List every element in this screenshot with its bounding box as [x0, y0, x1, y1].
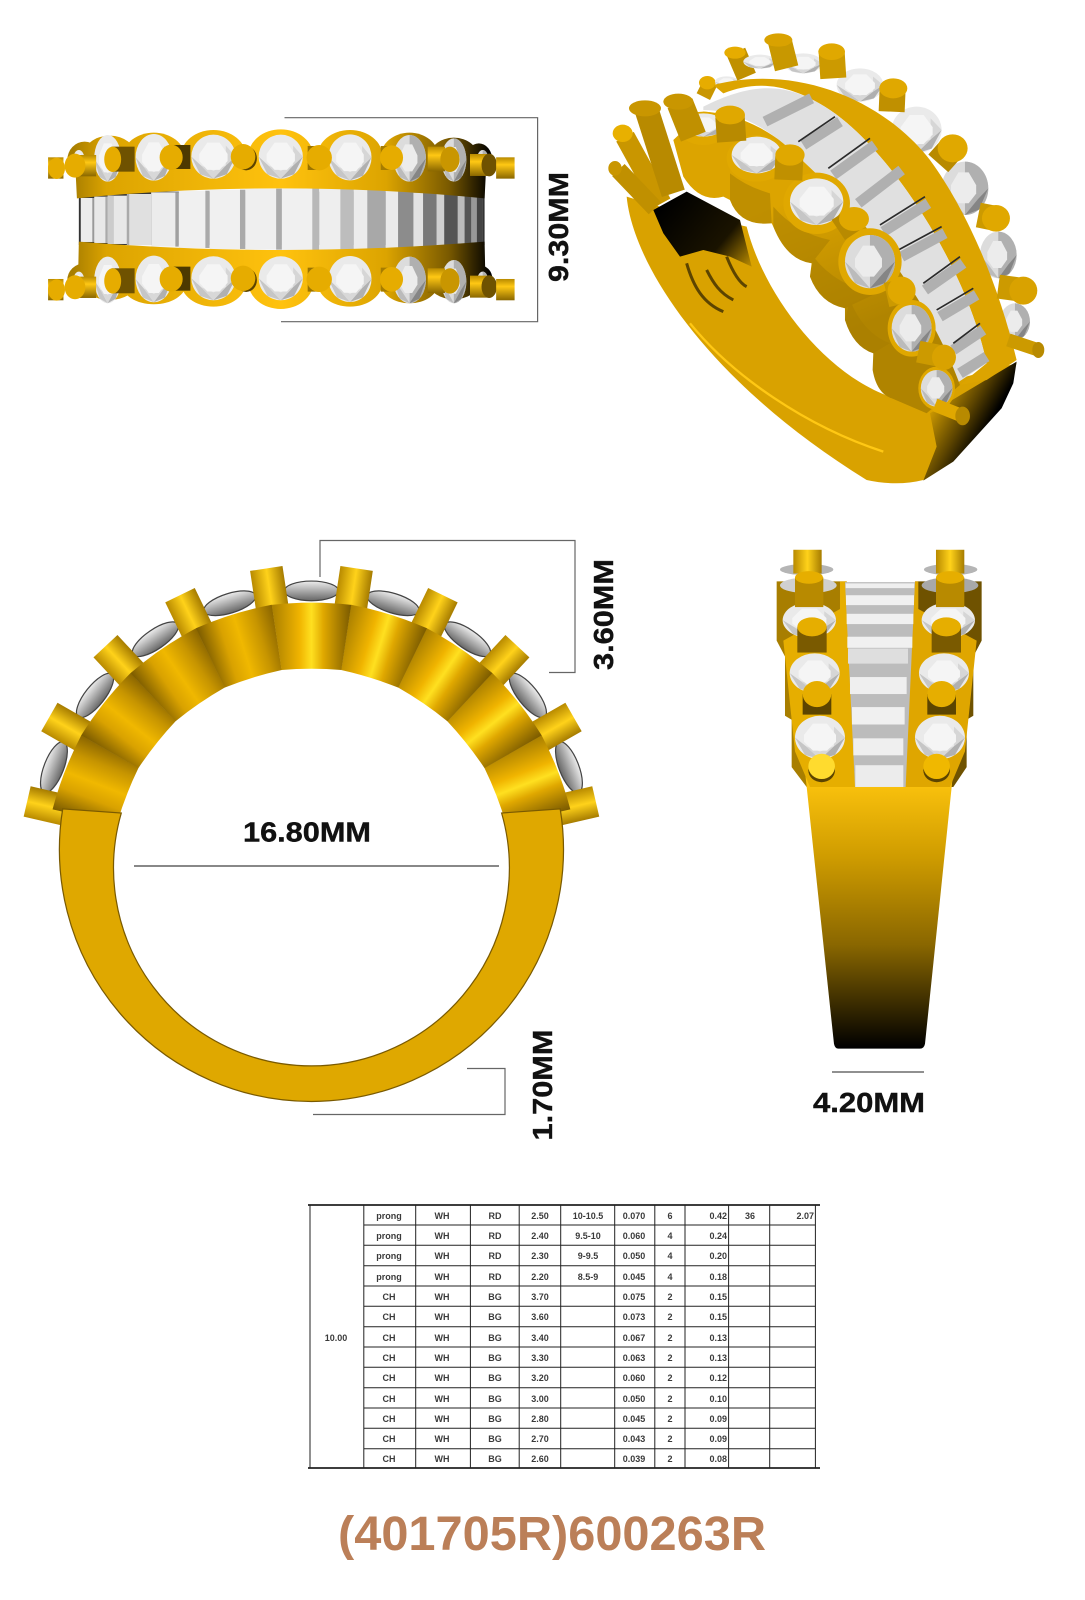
table rows: 2: [667, 1353, 673, 1363]
lower scalloped settings: [67, 254, 492, 309]
dimension line: 9.30MM: [281, 118, 538, 322]
shank shaded end: [923, 362, 1017, 481]
table rows: 2.50: [531, 1211, 549, 1221]
dimension line: 16.80MM: [134, 865, 499, 867]
table rows: 0.070: [623, 1211, 645, 1221]
table rows: 4: [667, 1251, 673, 1261]
table rows: RD: [488, 1272, 502, 1282]
table rows: 36: [745, 1211, 755, 1221]
table rows: 0.18: [709, 1272, 727, 1282]
panel: perspective view of ring: [608, 33, 1044, 483]
baguette stone row: [81, 188, 483, 250]
table rows: WH: [434, 1353, 450, 1363]
table rows: 3.70: [531, 1292, 549, 1302]
table rows: CH: [382, 1454, 396, 1464]
table rows: 0.09: [709, 1414, 727, 1424]
table rows: WH: [434, 1292, 450, 1302]
table rows: CH: [382, 1414, 396, 1424]
table rows: 9.5-10: [575, 1231, 601, 1241]
table rows: BG: [488, 1373, 502, 1383]
table rows: 0.15: [709, 1292, 727, 1302]
table rows: 2: [667, 1312, 673, 1322]
table rows: 4: [667, 1231, 673, 1241]
table rows: RD: [488, 1231, 502, 1241]
table rows: 0.050: [623, 1394, 645, 1404]
rear row far stones: [699, 47, 1030, 340]
table rows: 0.13: [709, 1353, 727, 1363]
table rows: BG: [488, 1333, 502, 1343]
table rows: prong: [376, 1251, 402, 1261]
table rows: 0.060: [623, 1231, 645, 1241]
table rows: WH: [434, 1272, 450, 1282]
table rows: BG: [488, 1353, 502, 1363]
table rows: 0.42: [709, 1211, 727, 1221]
table rows: 0.060: [623, 1373, 645, 1383]
panel: side view of ring: [777, 550, 982, 1049]
table rows: WH: [434, 1434, 450, 1444]
table rows: 0.045: [623, 1414, 645, 1424]
shank highlight: [690, 323, 883, 452]
stone specification table: [308, 1205, 820, 1468]
round stones left and right: [783, 602, 975, 759]
dimension line: 1.70MM: [313, 1068, 505, 1114]
table rows: 0.043: [623, 1434, 645, 1444]
table rows: 0.09: [709, 1434, 727, 1444]
engraved logo shadow: [653, 192, 752, 312]
table rows: WH: [434, 1414, 450, 1424]
table rows: 3.40: [531, 1333, 549, 1343]
table rows: CH: [382, 1292, 396, 1302]
back body of ring: [79, 192, 485, 245]
table rows: WH: [434, 1373, 450, 1383]
table rows: BG: [488, 1292, 502, 1302]
table rows: 0.15: [709, 1312, 727, 1322]
table rows: 6: [667, 1211, 673, 1221]
front row round stones: [682, 113, 952, 407]
cup shading: [730, 173, 890, 353]
upper pair of stones: [780, 564, 978, 593]
table rows: WH: [434, 1394, 450, 1404]
shank: [805, 771, 953, 1049]
label: 9.30MM: 9.30MM: [543, 172, 574, 282]
panel: front view of ring: [24, 566, 599, 1101]
table rows: BG: [488, 1434, 502, 1444]
radial gold settings: [50, 603, 572, 833]
table rows: CH: [382, 1394, 396, 1404]
merged size cell: 10.00: [325, 1333, 347, 1343]
baguette channel: [703, 88, 987, 383]
table rows: BG: [488, 1312, 502, 1322]
table rows: 9-9.5: [578, 1251, 598, 1261]
table rows: WH: [434, 1312, 450, 1322]
table rows: RD: [488, 1251, 502, 1261]
table rows: 2.30: [531, 1251, 549, 1261]
baguette stack: [845, 582, 915, 787]
table rows: prong: [376, 1272, 402, 1282]
table rows: BG: [488, 1454, 502, 1464]
gold inner setting: [783, 581, 855, 787]
table grid: [308, 1205, 820, 1468]
table rows: prong: [376, 1231, 402, 1241]
table rows: BG: [488, 1414, 502, 1424]
table rows: CH: [382, 1333, 396, 1343]
lower row of round stones and prongs: [48, 256, 515, 303]
table rows: 0.075: [623, 1292, 645, 1302]
table rows: 0.039: [623, 1454, 645, 1464]
table rows: prong: [376, 1211, 402, 1221]
table rows: 3.60: [531, 1312, 549, 1322]
table rows: RD: [488, 1211, 502, 1221]
table rows: 0.13: [709, 1333, 727, 1343]
table rows: [376, 1211, 814, 1464]
title: product code: (401705R)600263R: [338, 1508, 766, 1561]
table rows: 0.073: [623, 1312, 645, 1322]
table rows: 0.050: [623, 1251, 645, 1261]
gold setting backing: [777, 581, 857, 787]
table rows: 2: [667, 1434, 673, 1444]
table rows: BG: [488, 1394, 502, 1404]
label: 4.20MM: 4.20MM: [813, 1087, 925, 1118]
side-on round stones: [35, 581, 588, 796]
table rows: 3.00: [531, 1394, 549, 1404]
upper row of round stones and prongs: [48, 134, 515, 182]
outer gold rail: [713, 79, 1017, 385]
table rows: 2.20: [531, 1272, 549, 1282]
table rows: 8.5-9: [578, 1272, 598, 1282]
table rows: 0.10: [709, 1394, 727, 1404]
ring shank: [59, 809, 563, 1101]
table rows: 0.12: [709, 1373, 727, 1383]
table rows: 2.40: [531, 1231, 549, 1241]
upper gold rail: [75, 160, 487, 198]
table rows: 2.70: [531, 1434, 549, 1444]
table rows: 2.60: [531, 1454, 549, 1464]
table rows: 2: [667, 1292, 673, 1302]
table rows: WH: [434, 1251, 450, 1261]
baguette facets: [765, 98, 987, 373]
table rows: 0.20: [709, 1251, 727, 1261]
table rows: CH: [382, 1434, 396, 1444]
table rows: 2.80: [531, 1414, 549, 1424]
prongs: [608, 33, 1044, 425]
table rows: WH: [434, 1333, 450, 1343]
label: 3.60MM: 3.60MM: [588, 559, 619, 670]
table rows: WH: [434, 1211, 450, 1221]
radial prongs: [24, 566, 599, 827]
panel: top view of ring: [48, 129, 515, 309]
label: 16.80MM: 16.80MM: [243, 816, 371, 848]
table rows: CH: [382, 1353, 396, 1363]
upper scalloped settings: [67, 129, 492, 184]
table rows: 2: [667, 1333, 673, 1343]
table rows: WH: [434, 1231, 450, 1241]
prongs: [793, 550, 964, 782]
dimension line: 4.20MM: [832, 1071, 924, 1073]
table rows: 0.063: [623, 1353, 645, 1363]
shank: [627, 197, 1017, 483]
table rows: CH: [382, 1312, 396, 1322]
front cup body with scalloped edge: [673, 112, 960, 413]
label: 1.70MM: 1.70MM: [527, 1030, 558, 1140]
dimension line: 3.60MM: [320, 540, 575, 672]
table rows: 0.067: [623, 1333, 645, 1343]
table rows: 2: [667, 1373, 673, 1383]
table rows: 0.045: [623, 1272, 645, 1282]
table rows: 2: [667, 1414, 673, 1424]
table rows: 10-10.5: [573, 1211, 603, 1221]
table rows: 0.24: [709, 1231, 727, 1241]
table rows: CH: [382, 1373, 396, 1383]
lower gold rail: [78, 242, 485, 278]
table rows: 3.20: [531, 1373, 549, 1383]
table rows: 2.07: [796, 1211, 814, 1221]
table rows: WH: [434, 1454, 450, 1464]
table rows: 0.08: [709, 1454, 727, 1464]
table rows: 3.30: [531, 1353, 549, 1363]
table rows: 4: [667, 1272, 673, 1282]
table rows: 2: [667, 1394, 673, 1404]
table rows: 2: [667, 1454, 673, 1464]
cup rims: [678, 112, 955, 410]
